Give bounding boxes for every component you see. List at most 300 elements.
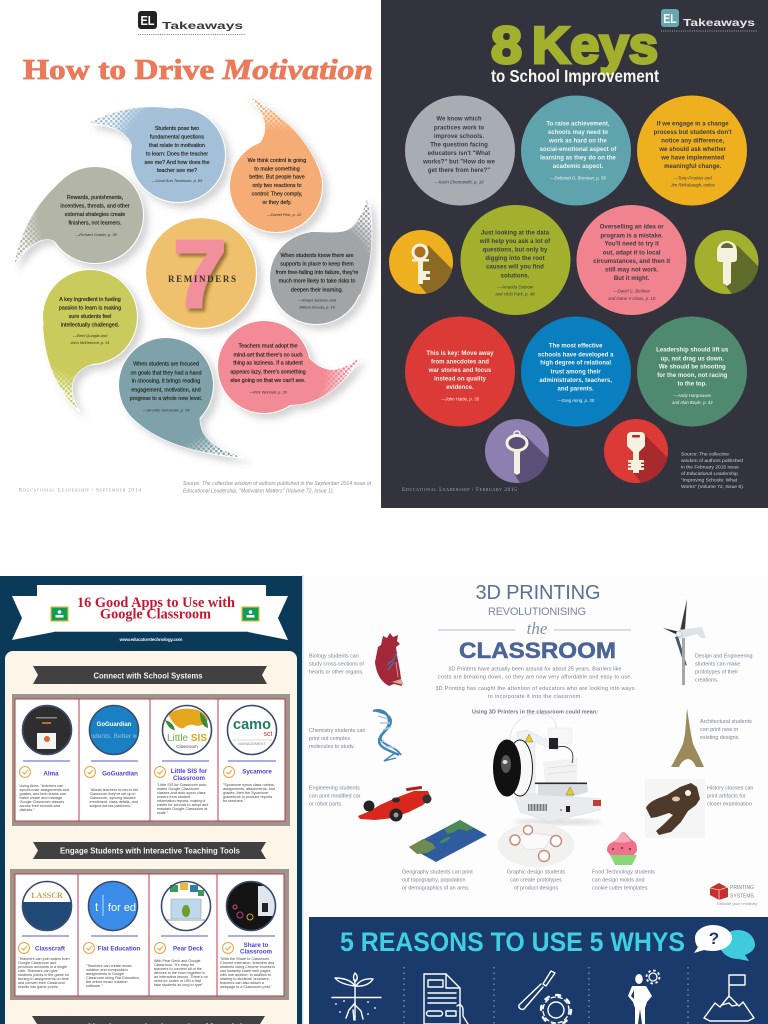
circle: Hattie quote: war stories and focus bbox=[428, 368, 492, 374]
intro text: 3D Printers have actually been around for about 25 years. Barriers like bbox=[448, 666, 622, 672]
app: Flat Education: Classroom using Flat Education, bbox=[86, 976, 140, 980]
text: architecture: Architectural students bbox=[700, 719, 752, 725]
circle: Anrig quote: schools have developed a bbox=[538, 352, 614, 358]
text: chemistry: Chemistry students can bbox=[309, 728, 365, 734]
circle: Anrig quote bbox=[521, 316, 631, 426]
circle: Chenoweth quote: We know which bbox=[436, 117, 482, 123]
app: Classcraft: Classcraft bbox=[35, 946, 65, 952]
app: Little SIS for Classroom: Classroom bbox=[176, 744, 198, 749]
circle: Chenoweth quote: works?" but "How do we bbox=[422, 159, 496, 165]
circle: Brennan quote: social-emotional aspect of bbox=[540, 147, 617, 153]
bubble: Jackson quote: When students know there are bbox=[280, 253, 354, 259]
circle: Datnow quote: questions, but only by bbox=[483, 248, 548, 254]
text: graphic design: Graphic design students bbox=[507, 870, 565, 876]
footer: journal line: Educational Leadership / February 2015 bbox=[402, 487, 517, 493]
app: Classcraft: results into game points. bbox=[18, 985, 59, 989]
circle: Anrig quote: and parents. bbox=[558, 387, 594, 393]
icon: lime key bbox=[694, 230, 758, 294]
bubble: Serravallo quote: When students are focused bbox=[133, 362, 199, 368]
intro text: 3D Printing has caught the attention of educators who are looking into ways bbox=[436, 686, 635, 692]
bubble: Tomlinson quote: —Carol Ann Tomlinson, p. 85 bbox=[151, 178, 203, 183]
text: design and engineering: students can make bbox=[695, 662, 740, 668]
circle: Hargreaves quote: to the top. bbox=[678, 382, 707, 388]
circle: Anrig quote: high degree of relational bbox=[540, 361, 611, 367]
bubble: Serravallo quote: on goals that they had a hand bbox=[130, 370, 202, 376]
app: Share to Classroom: Chrome extension, teachers and bbox=[220, 961, 274, 965]
app: Alma: Alma bbox=[43, 770, 59, 778]
source note: Educational Leadership, "Motivation Matters" (Volume 72, Issue 1). bbox=[183, 488, 334, 494]
bubble: Jackson quote: Allison Zmuda, p. 18 bbox=[298, 304, 336, 309]
subtitle: revolutionising: REVOLUTIONISING bbox=[488, 606, 586, 618]
app: Sycamore: camo bbox=[233, 717, 271, 733]
text: history: closer examination bbox=[707, 802, 752, 808]
app: GoGuardian bbox=[84, 706, 138, 808]
app: Sycamore bbox=[223, 706, 276, 803]
source note: wisdom of authors published bbox=[681, 458, 743, 464]
circle: Datnow quote: causes will you find bbox=[486, 265, 544, 271]
bubble: Tomlinson quote: see me? And how does the bbox=[144, 160, 210, 166]
circle: Berliner quote: out, adapt it to local bbox=[603, 250, 661, 256]
logo: EL Takeaways bbox=[138, 11, 245, 34]
icon: mountain with flag bbox=[704, 975, 754, 1021]
app: Flat Education: t bbox=[95, 900, 99, 914]
circle: Datnow quote: digging into the root bbox=[485, 256, 545, 262]
app: Pear Deck: need for codes or URLs that bbox=[154, 979, 202, 983]
title: 5 REASONS TO USE 5 WHYS bbox=[340, 927, 685, 957]
bubble: Jackson quote bbox=[269, 198, 372, 325]
text: design and engineering: Design and Engineering bbox=[695, 654, 753, 660]
logo: EL Takeaways: EL bbox=[663, 12, 677, 26]
app: Little SIS for Classroom bbox=[154, 706, 212, 815]
circle: Frontier quote bbox=[637, 96, 747, 206]
text: engineering: Engineering students bbox=[309, 786, 360, 792]
circle: Anrig quote: The most effective bbox=[549, 344, 603, 350]
app: Classcraft: "Teachers can pull rosters from bbox=[18, 957, 70, 961]
bubble: Curwin quote bbox=[14, 166, 144, 265]
source note: in the February 2015 issue bbox=[681, 464, 739, 470]
bubble: Jackson quote: from free-falling into failure, they're bbox=[276, 270, 358, 276]
app: Alma: across their schools and bbox=[20, 804, 60, 808]
logo: 3D Printing Systems bbox=[710, 883, 758, 906]
circle: Hargreaves quote bbox=[637, 316, 747, 426]
bubble: Quaglia quote bbox=[42, 269, 138, 412]
section ribbon: Connect with School Systems bbox=[33, 666, 267, 684]
bubble: Wormeli quote: appears lazy, there's something bbox=[230, 369, 306, 375]
app: Share to Classroom: "With the Share to Classroom bbox=[220, 957, 269, 961]
subtitle: to School Improvement bbox=[491, 66, 659, 86]
source note: Source: The collective wisdom of authors published in the September 2014 issue of bbox=[183, 481, 372, 487]
circle: Hargreaves quote: for the moon, not racing bbox=[657, 373, 728, 379]
app: Flat Education: notation and composition bbox=[86, 968, 128, 972]
app: Little SIS for Classroom: classes and auto-syncs class bbox=[157, 791, 206, 795]
icon: document in hand bbox=[424, 974, 468, 1024]
app: Sycamore: "Sycamore syncs class rosters, bbox=[223, 783, 275, 787]
circle: Anrig quote: administrators, teachers, bbox=[539, 378, 612, 384]
subtitle: the: the bbox=[527, 619, 548, 638]
bubble: Curwin quote: —Richard Curwin, p. 38 bbox=[74, 232, 117, 237]
circle: Chenoweth quote bbox=[405, 96, 515, 206]
app: Classcraft: Google Classroom and bbox=[18, 961, 56, 965]
app: Classcraft: turning in assignments on time bbox=[18, 977, 69, 981]
circle: Datnow quote: will help you ask a lot of bbox=[479, 239, 551, 245]
app: Classcraft: and convert their Classroom bbox=[18, 981, 65, 985]
app: Share to Classroom: Share to bbox=[244, 942, 269, 949]
text: geography: or demographics of an area. bbox=[402, 886, 469, 892]
bubble: Serravallo quote: in choosing, it brings reading bbox=[132, 379, 200, 385]
intro text: to incorporate it into the classroom. bbox=[488, 694, 582, 700]
text: design and engineering: creations. bbox=[695, 678, 718, 684]
app: Sycamore: assignments, attachments, and bbox=[223, 787, 275, 791]
footer: journal line: Educational Leadership / September 2014 bbox=[19, 488, 141, 494]
app: Pear Deck: Classroom, "it's easy for bbox=[154, 963, 195, 967]
app: Little SIS for Classroom: Classroom bbox=[173, 775, 205, 782]
bubble: Quaglia quote: A key ingredient in fueling bbox=[59, 297, 121, 303]
app: Sycamore: for teachers." bbox=[223, 799, 246, 803]
circle: Frontier quote: we have implemented bbox=[660, 155, 724, 161]
app: Sycamore: sct bbox=[264, 731, 273, 738]
app: Flat Education: the online music notation bbox=[86, 980, 127, 984]
text: architecture: can print new or bbox=[700, 727, 739, 733]
circle: Datnow quote: and Vicki Park, p. 48 bbox=[495, 292, 535, 297]
app: Classcraft bbox=[18, 882, 72, 989]
circle: Chenoweth quote: —Karin Chenoweth, p. 16 bbox=[433, 179, 484, 184]
text: history: History classes can bbox=[707, 786, 753, 792]
text: design and engineering: prototypes of their bbox=[695, 670, 738, 676]
app: Alma: grades, and tech teams can bbox=[20, 792, 66, 796]
bubble: Wormeli quote: mind-set that there's no such bbox=[233, 352, 303, 358]
icon: T-rex skull bbox=[645, 779, 705, 838]
app: Pear Deck: teachers to connect all of the bbox=[154, 967, 202, 971]
app: GoGuardian: GoGuardian bbox=[97, 722, 132, 728]
bubble: Curwin quote: finishers, not learners. bbox=[68, 220, 122, 226]
circle: Frontier quote: notice any difference, bbox=[661, 138, 724, 144]
circle: Hattie quote: —John Hattie, p. 36 bbox=[440, 397, 480, 402]
circle: Frontier quote: If we engage in a change bbox=[657, 121, 729, 127]
circle: Berliner quote: circumstances, and then it bbox=[593, 259, 670, 265]
circle: Berliner quote: You'll need to try it bbox=[605, 242, 659, 248]
bubble: Curwin quote: incentives, threats, and other bbox=[60, 204, 130, 210]
banner ribbon bbox=[12, 585, 288, 640]
title: classroom: CLASSROOM bbox=[459, 638, 616, 663]
text: biology: study cross-sections of bbox=[309, 662, 364, 668]
center badge: 7 reminders: REMINDERS bbox=[168, 274, 236, 284]
bubble: Tomlinson quote: fundamental questions bbox=[150, 134, 204, 140]
bubble: Pink quote: to make something bbox=[254, 166, 300, 172]
icon: race car bbox=[358, 786, 432, 822]
circle: Chenoweth quote: practices work to bbox=[434, 125, 484, 131]
icon: purple key bbox=[485, 419, 549, 483]
icon: heart model bbox=[375, 633, 404, 686]
circle: Brennan quote: learning as they do on the bbox=[540, 155, 616, 161]
bubble: Serravallo quote: —Jennifer Serravallo, p. 54 bbox=[141, 407, 190, 412]
icon: robot car bbox=[498, 823, 574, 867]
title: 3D Printing: 3D PRINTING bbox=[476, 582, 600, 604]
app: Sycamore: grades, then the Sycamore bbox=[223, 791, 268, 795]
circle: Berliner quote: —David C. Berliner bbox=[612, 289, 651, 294]
app: Share to Classroom: can instantly share web pages bbox=[220, 969, 271, 973]
card group: Connect with School Systems bbox=[12, 694, 290, 826]
circle: Hattie quote bbox=[405, 316, 515, 426]
section ribbon: Engage Students bbox=[33, 842, 266, 859]
app: Alma: synchronize assignments and bbox=[20, 788, 69, 792]
circle: Berliner quote: still may not work. bbox=[605, 268, 659, 274]
cream content panel bbox=[5, 651, 297, 1024]
bubble: Serravallo quote: engagement, motivation, and bbox=[131, 387, 201, 393]
circle: Hargreaves quote: —Andy Hargreaves bbox=[673, 393, 712, 398]
app: Little SIS for Classroom: Little SIS for bbox=[171, 768, 208, 775]
app: Little SIS for Classroom: Little SIS bbox=[167, 733, 207, 744]
circle: Brennan quote bbox=[521, 96, 631, 206]
circle: Brennan quote: academic aspect. bbox=[553, 164, 604, 170]
bubble: Tomlinson quote: teacher see me? bbox=[157, 168, 197, 174]
text: engineering: or robot parts. bbox=[309, 802, 343, 808]
intro text: costs are breaking down, so they are now very affordable and easy to use. bbox=[438, 674, 632, 680]
icon: Google Classroom right bbox=[242, 607, 259, 621]
bubble: Tomlinson quote: to learn: Does the teacher bbox=[146, 152, 208, 158]
circle: Hattie quote: from anecdotes and bbox=[431, 360, 489, 366]
app: Pear Deck: an interactive lesson. There's no bbox=[154, 975, 208, 979]
bubble: Quaglia quote: John McDermott, p. 61 bbox=[69, 340, 110, 345]
text: engineering: can print modified car bbox=[309, 794, 361, 800]
icon: wind turbine bbox=[663, 599, 706, 685]
circle: Brennan quote: To raise achievement, bbox=[546, 121, 610, 127]
title: 8 Keys: 8 bbox=[491, 17, 522, 75]
circle: Chenoweth quote: educators isn't "What bbox=[428, 151, 490, 157]
bubble: Jackson quote: supports in place to keep them bbox=[280, 262, 354, 268]
text: food technology: can design molds and bbox=[592, 878, 644, 884]
logo: EL Takeaways: Takeaways bbox=[162, 20, 243, 32]
icon: terrain model bbox=[409, 820, 487, 862]
app: Sycamore: MANAGEMENT bbox=[238, 742, 266, 746]
icon: speech bubbles: ? bbox=[709, 929, 719, 948]
circle: Chenoweth quote: get there from here?" bbox=[428, 168, 490, 174]
app: Classcraft: LASSCR bbox=[31, 891, 63, 900]
app: Pear Deck: take students so long to type" bbox=[154, 983, 204, 987]
app: GoGuardian: Classroom, syncing student bbox=[90, 796, 137, 800]
title: Google Classroom bbox=[100, 606, 211, 622]
circle: Frontier quote: we should ask whether bbox=[658, 147, 727, 153]
section ribbon: Connect with School Systems: Connect with School Systems bbox=[94, 672, 203, 680]
text: food technology: cookie cutter templates bbox=[592, 886, 648, 892]
bubble: Serravallo quote: progress to a whole new level. bbox=[130, 396, 202, 402]
icon: Eiffel tower bbox=[671, 708, 704, 767]
title: 8 Keys: Keys bbox=[532, 17, 658, 75]
source note: Source: The collective bbox=[681, 452, 729, 458]
bubble: Wormeli quote bbox=[217, 320, 360, 414]
panel: 3D Printing bbox=[302, 575, 768, 1024]
bubble: Quaglia quote: sure students feel bbox=[69, 314, 111, 320]
circle: Chenoweth quote: The question facing bbox=[430, 142, 488, 148]
app: Alma bbox=[20, 706, 72, 812]
bubble: Quaglia quote: intellectually challenged. bbox=[61, 323, 119, 329]
dividers bbox=[404, 967, 688, 1024]
logo: EL Takeaways: Takeaways bbox=[683, 18, 756, 29]
app: Alma: Using Alma, "teachers can bbox=[20, 784, 63, 788]
app: Share to Classroom: sharing to students' browsers, bbox=[220, 977, 270, 981]
app: GoGuardian: GoGuardian bbox=[102, 770, 138, 778]
app: Little SIS for Classroom: rosters from student bbox=[157, 795, 191, 799]
circle: Berliner quote bbox=[576, 205, 686, 315]
app: Classcraft: provision accounts in a single bbox=[18, 965, 67, 969]
app: Flat Education: software." bbox=[86, 984, 103, 988]
panel: How to Drive Motivation bbox=[0, 0, 380, 508]
panel: 16 Good Apps bbox=[0, 576, 302, 1024]
text: chemistry: molecules to study. bbox=[309, 744, 355, 750]
bubble: Pink quote: control: They comply, bbox=[252, 192, 303, 198]
circle: Datnow quote: Just looking at the data bbox=[481, 230, 550, 236]
app: Sycamore: gradebook to produce reports bbox=[223, 795, 272, 799]
app: Share to Classroom: webpage to a Classroom post." bbox=[220, 985, 273, 989]
source note: "Improving Schools: What bbox=[681, 478, 738, 484]
text: food technology: Food Technology students bbox=[592, 870, 655, 876]
bubble: Quaglia quote: passion to learn is making bbox=[59, 305, 121, 311]
app: Alma: districts." bbox=[20, 808, 35, 812]
bubble: Wormeli quote: else going on that we can't see. bbox=[230, 378, 306, 384]
text: chemistry: print out complex bbox=[309, 736, 350, 742]
circle: Datnow quote bbox=[460, 205, 570, 315]
panel: 8 Keys to School Improvement bbox=[381, 0, 768, 508]
bubble: Wormeli quote: —Rick Wormeli, p. 28 bbox=[248, 389, 288, 394]
bubble: Tomlinson quote: that relate to motivation bbox=[149, 143, 205, 149]
app: Little SIS for Classroom: information reports, making it bbox=[157, 799, 206, 803]
circle: Hargreaves quote: We should be shooting bbox=[659, 365, 726, 371]
text: biology: Biology students can bbox=[309, 654, 359, 660]
bubble: Curwin quote: external strategies create bbox=[65, 212, 125, 218]
app: Flat Education: assignments in Google bbox=[86, 972, 124, 976]
bubble: Jackson quote: —Robyn Jackson and bbox=[297, 297, 337, 302]
circle: Hargreaves quote: up, not drag us down. bbox=[661, 356, 724, 362]
card group: Engage Students bbox=[10, 869, 289, 1000]
logo: EL Takeaways bbox=[661, 9, 757, 31]
bubble: Jackson quote: much more likely to take risks to bbox=[279, 278, 355, 284]
circle: Chenoweth quote: improve schools. bbox=[434, 134, 484, 140]
app: Pear Deck: With Pear Deck and Google bbox=[154, 959, 200, 963]
text: graphic design: of product designs bbox=[514, 886, 558, 892]
section ribbon: Engage Students: Engage Students with Interactive Teaching Tools bbox=[60, 846, 241, 856]
bubble: Tomlinson quote: Students pose two bbox=[155, 126, 199, 132]
circle: Hargreaves quote: and Alan Boyle, p. 42 bbox=[672, 400, 713, 405]
circle: Datnow quote: solutions. bbox=[501, 273, 530, 279]
icon: speech bubbles bbox=[694, 925, 755, 961]
app: GoGuardian: Classroom they've set up in bbox=[90, 792, 135, 796]
circle: Datnow quote: —Amanda Datnow bbox=[496, 284, 534, 289]
app: Little SIS for Classroom: maintain Google Classroom at bbox=[157, 807, 208, 811]
app: Share to Classroom: with one another. In addition to bbox=[220, 973, 271, 977]
app: Alma: batch create and manage bbox=[20, 796, 62, 800]
app: Share to Classroom: teachers can also attach a bbox=[220, 981, 265, 985]
bubble: Pink quote: or they defy. bbox=[262, 200, 292, 206]
app: Flat Education: for ed bbox=[108, 902, 136, 914]
circle: Anrig quote: —Greg Anrig, p. 30 bbox=[556, 398, 595, 403]
app: GoGuardian: subject across platforms." bbox=[90, 804, 133, 808]
circle: Berliner quote: But it might. bbox=[614, 276, 650, 282]
text: geography: Geography students can print bbox=[402, 870, 473, 876]
app: Pear Deck bbox=[154, 882, 210, 987]
icon: person with gear bbox=[628, 970, 660, 1024]
app: Pear Deck: Pear Deck bbox=[173, 946, 204, 952]
bubble: Wormeli quote: thing as laziness. If a student bbox=[233, 361, 303, 367]
circle: Hattie quote: evidence. bbox=[446, 385, 474, 391]
app: Classcraft: click. Teachers can give bbox=[18, 969, 58, 973]
bubble: Serravallo quote bbox=[118, 337, 245, 458]
circle: Berliner quote: Overselling an idea or bbox=[600, 225, 664, 231]
app: Little SIS for Classroom: scale." bbox=[157, 811, 169, 815]
panel: 5 Reasons to Use 5 Whys bbox=[309, 917, 768, 1024]
app: Share to Classroom bbox=[220, 882, 276, 989]
source note: Works" (Volume 72, Issue 5). bbox=[681, 484, 744, 490]
icon: 3D printer bbox=[493, 714, 602, 825]
app: Classcraft: students points in the game for bbox=[18, 973, 70, 977]
app: GoGuardian: "Allows teachers to mirror the bbox=[90, 788, 138, 792]
logo: 3D Printing Systems: SYSTEMS bbox=[730, 894, 755, 900]
title: 16 Good Apps to Use with bbox=[77, 595, 235, 611]
app: Share to Classroom: students using Chrome browsers bbox=[220, 965, 275, 969]
logo: 3D Printing Systems: PRINTING bbox=[730, 885, 754, 891]
app: Alma: Google Classroom classes bbox=[20, 800, 64, 804]
circle: Berliner quote: program is a mistake. bbox=[600, 233, 663, 239]
circle: Hattie quote: This is key: Move away bbox=[426, 351, 494, 357]
title: How to Drive Motivation bbox=[23, 54, 373, 86]
app: GoGuardian: enrollment, class details, and bbox=[90, 800, 138, 804]
icon: screwdriver and gear bbox=[519, 971, 571, 1024]
app: Little SIS for Classroom: easier for schools to adopt and bbox=[157, 803, 208, 807]
circle: Frontier quote: process but students don't bbox=[654, 130, 732, 136]
bubble: Quaglia quote: —Eleni Quaglia and bbox=[72, 333, 108, 338]
bubble: Tomlinson quote bbox=[88, 107, 226, 203]
circle: Brennan quote: work as hard on the bbox=[548, 138, 607, 144]
circle: Frontier quote: —Tony Frontier and bbox=[673, 175, 712, 180]
text: graphic design: can create prototypes bbox=[510, 878, 562, 884]
text: history: print artifacts for bbox=[707, 794, 746, 800]
bubble: Pink quote bbox=[229, 94, 323, 233]
circle: Hattie quote: instead on quality bbox=[434, 376, 487, 382]
circle: Berliner quote: and Gene V Glass, p. 10 bbox=[608, 296, 656, 301]
bubble: Jackson quote: deepen their learning. bbox=[291, 287, 343, 293]
bubble: Pink quote: —Daniel Pink, p. 12 bbox=[266, 212, 302, 217]
app: Flat Education bbox=[84, 882, 141, 988]
bubble: Wormeli quote: Teachers must adopt the bbox=[238, 344, 298, 350]
section ribbon: Use Interactive Learning Materials bbox=[32, 1016, 265, 1024]
icon: DNA helix bbox=[373, 710, 401, 761]
circle: Frontier quote: meaningful change. bbox=[664, 164, 722, 170]
logo: 3D Printing Systems: Unleash your creativity bbox=[717, 901, 758, 906]
url: www.educatorstechnology.com bbox=[118, 637, 182, 642]
text: architecture: existing designs. bbox=[700, 735, 740, 741]
app: Pear Deck: devices in the room together in bbox=[154, 971, 205, 975]
bubble: Pink quote: only two reactions to bbox=[252, 183, 302, 189]
circle: Frontier quote: Jim Rickabaugh, online bbox=[669, 182, 716, 187]
circle: Brennan quote: schools may need to bbox=[548, 130, 608, 136]
circle: Hargreaves quote: Leadership should lift us bbox=[656, 348, 729, 354]
icon: plant and roots bbox=[332, 973, 381, 1020]
bubble: Pink quote: We think control is going bbox=[248, 158, 306, 164]
app: Share to Classroom: Classroom bbox=[240, 948, 272, 956]
circle: Brennan quote: —Deborah D. Brennan, p. 56 bbox=[549, 176, 606, 181]
app: GoGuardian: udents, Better w bbox=[91, 733, 138, 740]
app: Flat Education: "Teachers can create music bbox=[86, 964, 132, 968]
text: biology: hearts or other organs. bbox=[309, 670, 364, 676]
source note: of Educational Leadership, bbox=[681, 472, 739, 477]
app: Little SIS for Classroom: mates Google Classroom bbox=[157, 787, 199, 791]
bubble: Pink quote: better. But people have bbox=[249, 175, 305, 181]
center badge: 7 reminders: 7 bbox=[173, 221, 227, 328]
center badge: 7 reminders bbox=[146, 218, 256, 328]
circle: Anrig quote: trust among their bbox=[551, 370, 601, 376]
text: geography: out topography, population bbox=[402, 878, 465, 884]
app: Sycamore: Sycamore bbox=[242, 768, 272, 776]
app: Flat Education: Flat Education bbox=[98, 946, 141, 952]
icon: cupcake bbox=[607, 832, 637, 865]
